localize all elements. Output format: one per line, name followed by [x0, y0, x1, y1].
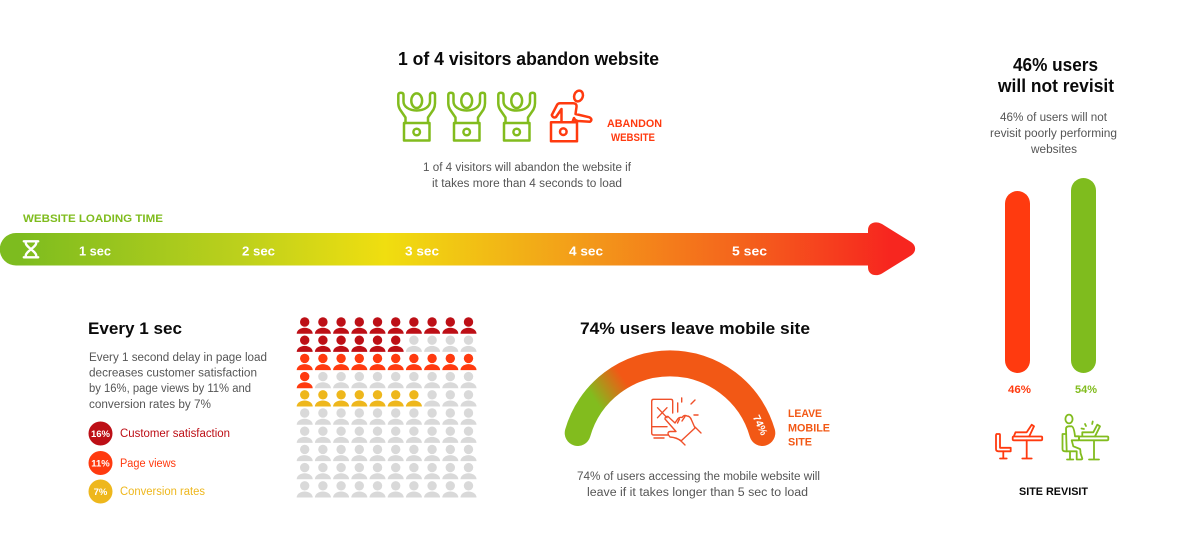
legend: page views: 11%: [91, 458, 110, 470]
text: revisit description: 46% of users will not: [1000, 112, 1108, 124]
legend: customer satisfaction: Customer satisfaction: [120, 428, 230, 440]
heading: 74% users leave mobile site: 74% users leave mobile site: [580, 319, 810, 338]
text: abandon description: 1 of 4 visitors will abandon the website if: [423, 162, 632, 174]
label: leave mobile site: LEAVE: [788, 408, 822, 420]
panel: mobile site: [577, 319, 830, 499]
label: abandon website: WEBSITE: [611, 132, 655, 144]
text: abandon description: it takes more than 4 seconds to load: [432, 178, 622, 190]
text: delay description: by 16%, page views by 11% and: [89, 383, 251, 395]
label: leave mobile site: MOBILE: [788, 422, 830, 434]
tick labels: seconds: 1 sec: [79, 244, 111, 258]
legend: conversion rates: Conversion rates: [120, 486, 205, 498]
icon: staying visitor 3: [498, 93, 535, 140]
heading: website loading time: WEBSITE LOADING TIME: [23, 213, 163, 225]
text: mobile description: 74% of users accessing the mobile website will: [577, 471, 820, 483]
arrow: loading timeline: [0, 222, 915, 275]
legend: customer satisfaction: [88, 422, 230, 446]
text: revisit description: revisit poorly performing: [990, 128, 1117, 140]
legend: customer satisfaction: 16%: [91, 429, 111, 440]
legend: conversion rates: 7%: [94, 487, 108, 498]
label: site revisit: SITE REVISIT: [1019, 486, 1088, 498]
icon: hourglass: [24, 241, 38, 257]
panel: every 1 sec: [88, 319, 267, 504]
text: delay description: decreases customer satisfaction: [89, 368, 257, 380]
gauge chart: 74%: [578, 363, 770, 438]
heading: 46% users will not revisit: [997, 55, 1114, 96]
icon: person at desk: [1062, 415, 1108, 460]
label: abandon website: [607, 118, 662, 144]
icon: phone with tapping hand: [652, 398, 701, 445]
text: mobile description: [577, 471, 820, 499]
text: revisit description: websites: [1030, 144, 1077, 156]
icon: empty desk: [996, 425, 1042, 458]
text: abandon description: [423, 162, 632, 190]
legend: conversion rates: [88, 480, 205, 504]
text: mobile description: leave if it takes longer than 5 sec to load: [587, 487, 808, 499]
legend: page views: [88, 451, 176, 475]
value: 46%: 46%: [1008, 384, 1031, 396]
panel: abandon website: [398, 49, 662, 190]
tick labels: seconds: 4 sec: [569, 244, 603, 258]
value: 54%: 54%: [1075, 384, 1097, 396]
pictogram chart: 100 people: [297, 317, 476, 498]
heading: 1 of 4 visitors abandon website: 1 of 4 visitors abandon website: [398, 49, 659, 69]
text: delay description: [89, 352, 267, 411]
bar: 54%: [1071, 178, 1096, 373]
icon: staying visitor 2: [448, 93, 485, 140]
label: leave mobile site: SITE: [788, 436, 812, 448]
tick labels: seconds: 3 sec: [405, 244, 439, 258]
icon: staying visitor 1: [398, 93, 435, 140]
label: leave mobile site: [788, 408, 830, 448]
text: delay description: Every 1 second delay in page load: [89, 352, 267, 364]
icon: visitor leaving: [551, 89, 591, 141]
heading: every 1 sec: Every 1 sec: [88, 319, 182, 338]
gauge chart: 74%: 74%: [750, 413, 770, 438]
legend: page views: Page views: [120, 458, 176, 470]
text: delay description: conversion rates by 7%: [89, 399, 211, 411]
text: revisit description: [990, 112, 1117, 156]
panel: site revisit: [990, 55, 1117, 498]
tick labels: seconds: 2 sec: [242, 244, 275, 258]
tick labels: seconds: 5 sec: [732, 244, 767, 258]
tick labels: seconds: [79, 244, 767, 258]
heading: 46% users will not revisit: 46% users: [1013, 55, 1098, 75]
heading: 46% users will not revisit: will not revisit: [997, 76, 1114, 96]
label: abandon website: ABANDON: [607, 118, 662, 130]
bar: 46%: [1005, 191, 1030, 373]
